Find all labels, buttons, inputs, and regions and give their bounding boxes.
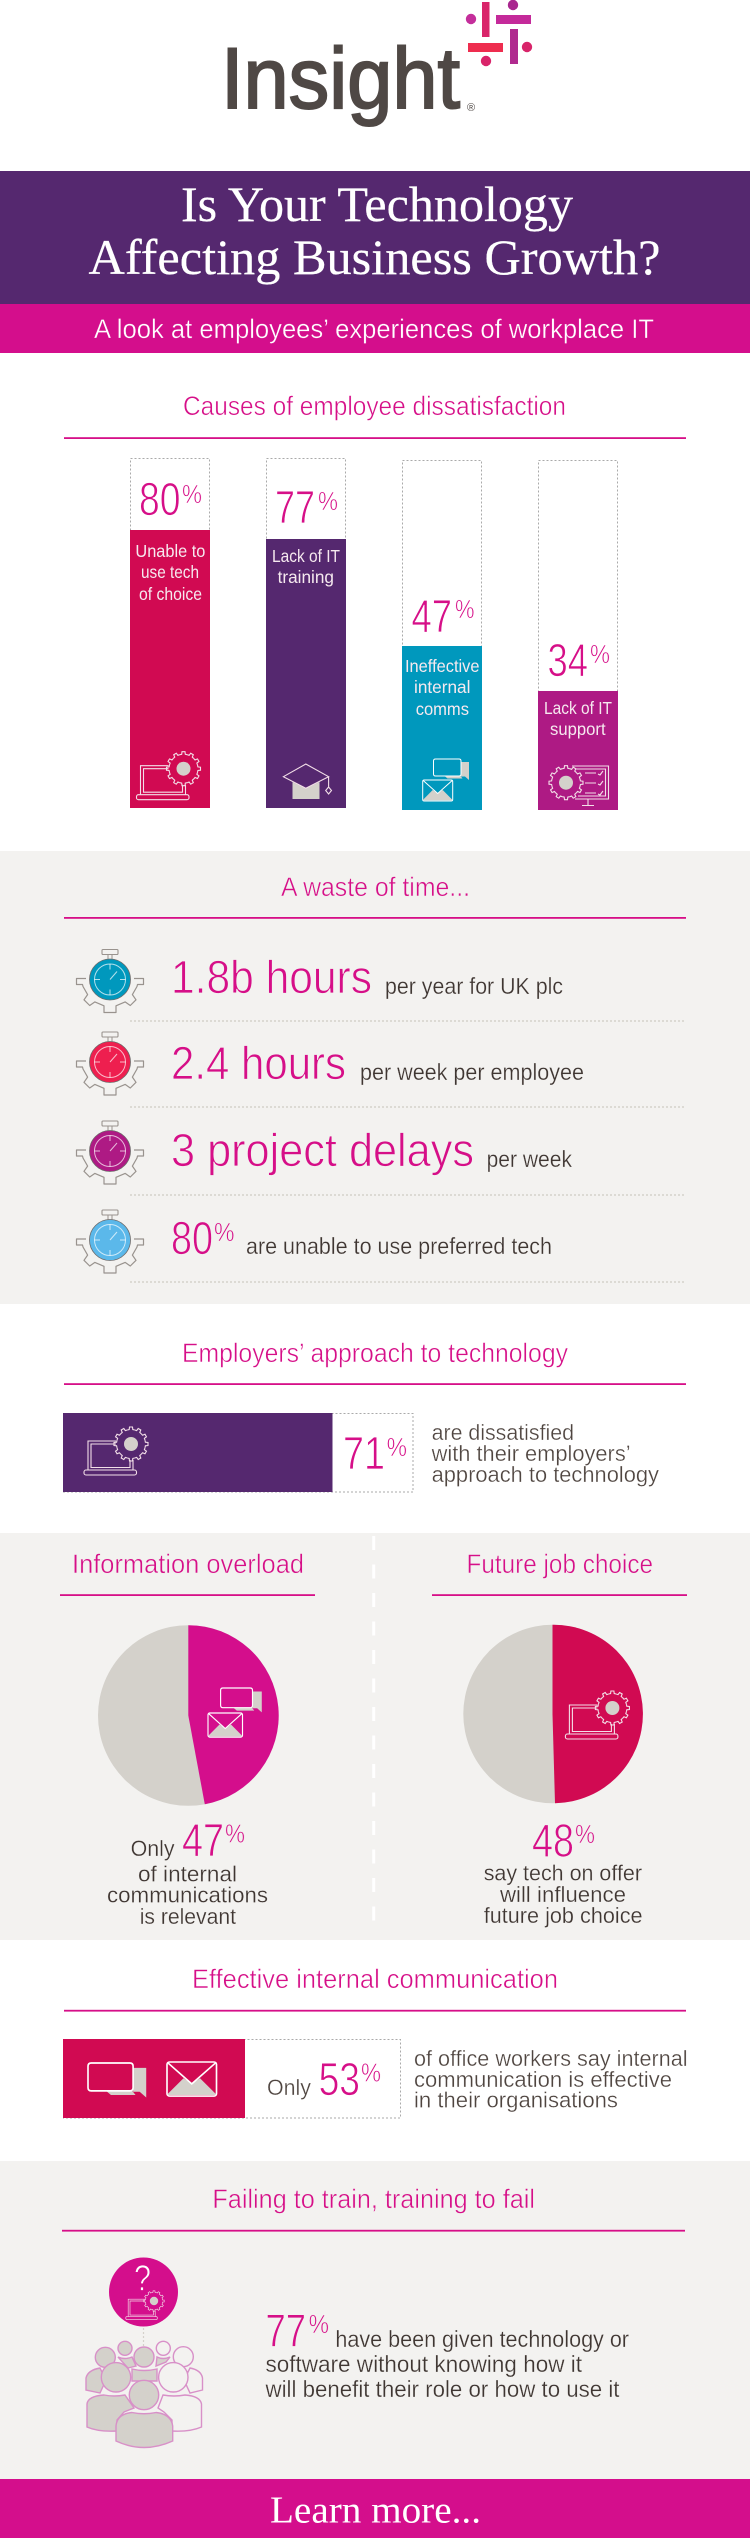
bar: 34% <box>538 460 618 810</box>
panel: learn more footer <box>0 2479 750 2538</box>
row: 3 project delays <box>76 1121 686 1195</box>
stat description: approach to technology <box>432 1462 659 1487</box>
icon: stopwatch gear blue <box>76 950 144 1012</box>
icon: chat and envelope <box>208 1688 262 1737</box>
stat bar: 71%: % <box>387 1432 407 1462</box>
icon: stopwatch gear red <box>76 1032 144 1095</box>
bar: 34%: % <box>590 639 610 669</box>
icon: laptop and gear <box>136 752 200 800</box>
bar: 47%: comms <box>416 699 469 719</box>
bar: 77% <box>266 458 346 808</box>
bar: 77%: 77 <box>275 481 315 533</box>
row: 3 project delays: per week <box>487 1146 572 1172</box>
panel: causes of employee dissatisfaction <box>64 391 686 810</box>
bar: 47%: 47 <box>412 590 452 642</box>
stat text: will influence <box>499 1882 626 1907</box>
stat description: in their organisations <box>414 2088 618 2113</box>
icon: gear and monitor checklist <box>549 766 608 806</box>
heading: Information overload <box>72 1549 304 1579</box>
row: 80%: % <box>214 1217 234 1247</box>
panel: title banner <box>0 171 750 304</box>
stat description <box>431 1420 659 1487</box>
stat text: 48 <box>532 1815 574 1867</box>
call to action: Learn more... <box>270 2490 481 2532</box>
logo wordmark: Insight <box>221 31 460 127</box>
stat bar: 53%: Only <box>267 2075 311 2100</box>
stat description <box>414 2046 688 2113</box>
pie chart: 47% <box>98 1625 279 1806</box>
icon: graduation cap <box>283 764 332 799</box>
panel: failing to train <box>0 2161 750 2479</box>
stat description: with their employers’ <box>431 1441 631 1466</box>
stat text: communications <box>107 1883 268 1908</box>
row: 2.4 hours: per week per employee <box>360 1059 584 1085</box>
icon: thought bubble with question mark: ? <box>134 2258 151 2298</box>
stat bar: 71%: 71 <box>343 1427 385 1479</box>
bar: 47%: internal <box>414 677 470 697</box>
heading: Future job choice <box>466 1549 653 1579</box>
stat text: is relevant <box>140 1904 236 1929</box>
bar: 47%: Ineffective <box>405 656 480 676</box>
bar: 47%: % <box>455 594 474 624</box>
bar: 77%: % <box>318 486 338 516</box>
bar: 80%: 80 <box>139 473 180 525</box>
stat text <box>484 1815 643 1928</box>
stat text: % <box>225 1819 245 1849</box>
icon: chat and envelope <box>88 2062 216 2097</box>
panel: subtitle banner <box>0 304 750 353</box>
row: 1.8b hours: per year for UK plc <box>385 973 563 999</box>
icon: chat and envelope <box>423 759 469 801</box>
icon: laptop and gear <box>84 1427 148 1475</box>
stat description: communication is effective <box>414 2067 672 2092</box>
heading: Employers’ approach to technology <box>182 1338 568 1368</box>
stat bar: 53%: % <box>361 2058 381 2088</box>
stat text: will benefit their role or how to use it <box>265 2376 620 2402</box>
registered mark: ® <box>467 102 475 114</box>
title line 2: Affecting Business Growth? <box>88 229 660 285</box>
bar: 34%: Lack of IT <box>544 698 612 718</box>
panel: pie charts <box>0 1533 750 1940</box>
stat text <box>265 2305 629 2402</box>
stat bar: 53% <box>63 2039 400 2118</box>
heading: Causes of employee dissatisfaction <box>183 391 566 421</box>
panel: logo header <box>221 0 532 127</box>
row: 80% <box>76 1210 686 1282</box>
panel: future job choice <box>432 1549 687 1928</box>
bar: 77%: training <box>278 567 334 587</box>
row: 1.8b hours: 1.8b hours <box>171 951 372 1003</box>
stat bar: 71% <box>63 1413 413 1492</box>
panel: employers' approach to technology <box>63 1338 686 1492</box>
title line 1: Is Your Technology <box>181 176 573 232</box>
stat bar: 53%: 53 <box>319 2053 360 2105</box>
stat text <box>107 1814 268 1929</box>
stat text: software without knowing how it <box>266 2351 583 2377</box>
pie chart: 48% <box>463 1625 643 1803</box>
stat description: of office workers say internal <box>414 2046 688 2071</box>
stat text: 77 <box>266 2305 306 2357</box>
icon: thought bubble with question mark <box>109 2258 178 2346</box>
icon: group of people <box>86 2341 202 2448</box>
subtitle: A look at employees’ experiences of workplace IT <box>94 314 654 344</box>
stat text: have been given technology or <box>335 2326 629 2352</box>
panel: effective internal communication <box>63 1964 688 2118</box>
stat text: % <box>575 1819 595 1849</box>
bar: 34%: support <box>550 719 606 739</box>
bar: 80% <box>130 458 210 808</box>
row: 80%: 80 <box>171 1212 213 1264</box>
bar: 34%: 34 <box>548 634 588 686</box>
stat text: % <box>309 2309 329 2339</box>
logo mark <box>466 0 532 66</box>
row: 2.4 hours <box>76 1032 686 1107</box>
heading: Effective internal communication <box>192 1964 558 1994</box>
icon: stopwatch gear light blue <box>76 1210 144 1273</box>
stat text: say tech on offer <box>484 1861 642 1886</box>
heading: A waste of time... <box>281 872 470 902</box>
row: 2.4 hours: 2.4 hours <box>171 1037 346 1089</box>
panel: a waste of time <box>0 851 750 1304</box>
bar: 77%: Lack of IT <box>272 546 340 566</box>
bar: 80%: Unable to <box>135 541 205 561</box>
stat text: of internal <box>138 1862 237 1887</box>
row: 1.8b hours <box>76 950 686 1021</box>
bar: 80%: of choice <box>139 584 202 604</box>
icon: laptop and gear <box>565 1691 629 1739</box>
row: 80%: are unable to use preferred tech <box>246 1233 552 1259</box>
bar: 47% <box>402 460 482 810</box>
stat description: are dissatisfied <box>432 1420 574 1445</box>
row: 3 project delays: 3 project delays <box>171 1124 474 1176</box>
panel: information overload <box>60 1549 315 1929</box>
icon: stopwatch gear purple <box>76 1121 144 1184</box>
bar: 80%: % <box>182 479 202 509</box>
stat text: Only <box>131 1836 175 1861</box>
bar: 80%: use tech <box>141 562 199 582</box>
heading: Failing to train, training to fail <box>212 2184 535 2214</box>
stat text: future job choice <box>484 1903 643 1928</box>
stat text: 47 <box>182 1814 224 1866</box>
